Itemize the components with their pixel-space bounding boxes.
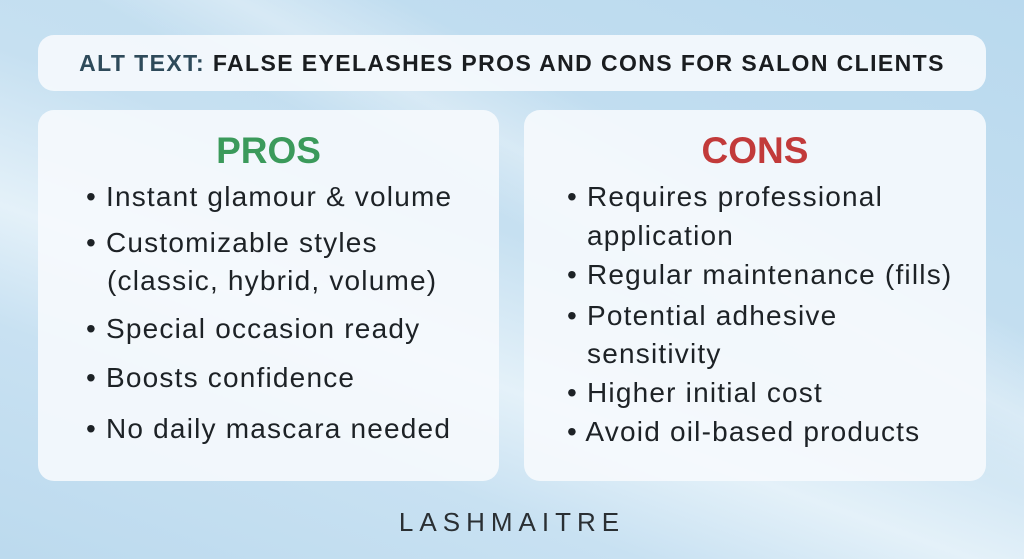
list: pros: • Boosts confidence <box>86 362 355 393</box>
list: pros <box>86 181 452 444</box>
heading: cons: CONS <box>702 130 808 171</box>
panel: cons <box>524 110 986 481</box>
title: ALT TEXT: FALSE EYELASHES PROS AND CONS FOR SALON CLIENTS <box>79 50 945 76</box>
list: pros: • Customizable styles <box>86 227 378 258</box>
list: cons: • Higher initial cost <box>567 377 823 408</box>
list: cons: • Potential adhesive <box>567 300 837 331</box>
list: pros: • No daily mascara needed <box>86 413 451 444</box>
list: cons: • Regular maintenance (fills) <box>567 259 952 290</box>
title <box>38 35 986 91</box>
list: pros: • Instant glamour & volume <box>86 181 452 212</box>
list: cons: sensitivity <box>587 338 722 369</box>
list: pros: • Special occasion ready <box>86 313 420 344</box>
list: cons: • Avoid oil-based products <box>567 416 920 447</box>
list: pros: (classic, hybrid, volume) <box>107 265 437 296</box>
brand logo text: LASHMAITRE <box>399 507 625 537</box>
list: cons: application <box>587 220 734 251</box>
panel: pros <box>38 110 499 481</box>
list: cons <box>567 181 952 447</box>
heading: pros: PROS <box>216 130 321 171</box>
list: cons: • Requires professional <box>567 181 883 212</box>
